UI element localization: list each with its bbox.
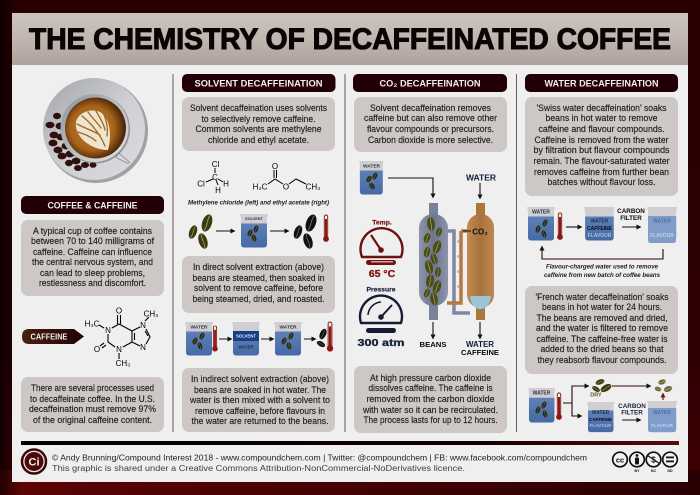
caffeine label [22, 329, 84, 344]
credit text [52, 454, 587, 473]
diagram: French water process: CAFFEINE [589, 417, 612, 422]
chemical structures: solvents: O [272, 162, 278, 171]
text block: French water: and the water is filtered to remove [536, 323, 668, 333]
diagram: Swiss water process: FLAVOUR [650, 233, 674, 239]
text block: direct extraction: In direct solvent extraction (above) [193, 262, 324, 272]
chemical structures: solvents: O [283, 182, 289, 192]
text block: typical cup: the central nervous system, and [32, 257, 153, 267]
chemical structures: solvents: H [215, 186, 221, 195]
diagram: indirect solvent extraction: WATER [191, 324, 208, 330]
text block: Swiss water: 'Swiss water decaffeination' soaks [536, 103, 667, 113]
diagram: indirect solvent extraction: SOLVENT [236, 334, 256, 338]
diagram: Swiss water process: FLAVOUR [588, 233, 612, 239]
text block: direct extraction: beans are steamed, then soaked in [192, 273, 325, 283]
text block: typical cup: caffeine. Caffeine can influence [33, 247, 152, 257]
caption: flavour-charged water: caffeine from new batch of coffee beans [544, 272, 660, 279]
text block: CO2 process: At high pressure carbon dioxide [370, 373, 491, 383]
text block: CO2 process: removed from the carbon dioxide [366, 394, 495, 404]
text block: decaffeination rules [21, 377, 164, 432]
chemical structures: solvents: H₃C [253, 182, 268, 192]
chemical structures: solvents: Cl [197, 180, 205, 188]
chemical structure: caffeine: CH₃ [116, 359, 130, 368]
gauge: temperature: 65 °C [369, 268, 396, 280]
text block: direct extraction: solvent to remove caffeine, before [194, 283, 323, 293]
text block: CO2 process [354, 366, 507, 433]
text block: indirect extraction: remove caffeine, before flavours in [195, 406, 325, 416]
text block: French water: added to the dried beans so that [540, 344, 664, 354]
diagram: indirect solvent extraction [185, 322, 333, 356]
text block: Swiss water: batches without flavour loss. [548, 177, 656, 187]
chemical structure: caffeine: O [94, 345, 100, 354]
heading: coffee and caffeine [21, 196, 164, 214]
text block: CO2 intro: caffeine but can also remove other [364, 113, 497, 123]
text block: CO2 process: dissolves caffeine. The caffeine is [368, 383, 493, 393]
diagram: indirect solvent extraction: WATER [238, 344, 254, 350]
licence badges: cc [616, 455, 624, 464]
logo: Compound Interest [22, 450, 46, 474]
footer [21, 441, 679, 474]
caption: flavour-charged water: Flavour-charged water used to remove [546, 264, 658, 270]
title [12, 13, 688, 65]
label: water and caffeine out: CAFFEINE [461, 348, 499, 357]
chemical structures: solvents [197, 160, 320, 195]
chemical structure: caffeine: N [140, 343, 146, 352]
diagram: French water process: CARBON [618, 403, 646, 410]
diagram: direct solvent extraction: SOLVENT [245, 217, 264, 221]
diagram: French water process: FLAVOUR [651, 423, 674, 428]
text block: CO2 intro: Carbon dioxide is more selective. [368, 135, 493, 145]
licence badges: $ [651, 455, 656, 465]
chemical structures: solvents: CH₃ [306, 182, 320, 192]
chemical structures: solvents: H [223, 180, 229, 188]
heading: solvent decaffeination: SOLVENT DECAFFEINATION [194, 78, 323, 88]
diagram: direct solvent extraction [187, 213, 329, 250]
diagram: CO2 extraction vessels [359, 161, 499, 357]
chemical structure: caffeine: CH₃ [144, 310, 158, 318]
vessel: carbon dioxide and water [467, 203, 494, 320]
chemical structure: caffeine: N [140, 321, 146, 330]
diagram: Swiss water process [527, 207, 677, 259]
label: water and caffeine out [461, 340, 499, 357]
text block: indirect extraction [182, 368, 335, 432]
diagram: Swiss water process: WATER [591, 218, 609, 224]
heading: water decaffeination [525, 74, 678, 92]
panel: coffee and caffeine [21, 78, 164, 432]
diagram: French water process: WATER [653, 410, 671, 416]
text block: typical cup: can lead to sleep problems, [40, 268, 145, 278]
gauge: temperature: Temp. [372, 220, 392, 226]
beaker: water and beans [359, 161, 384, 194]
text block: CO2 intro: Solvent decaffeination removes [370, 103, 492, 113]
text block: French water [525, 286, 678, 374]
text block: Swiss water [525, 97, 678, 196]
text block: indirect extraction: In indirect solvent extraction (above) [191, 374, 329, 384]
gauge: temperature [360, 220, 402, 280]
diagram: Swiss water process: WATER [532, 210, 550, 216]
text block: direct extraction: being steamed, dried, and roasted. [192, 294, 324, 304]
text block: typical cup: restlessness and discomfort. [39, 278, 146, 288]
logo: Compound Interest: Ci [28, 456, 40, 468]
text block: decaffeination rules: to decaffeinate coffee. In the U.S. [30, 394, 155, 404]
text block: French water: 'French water decaffeination' soaks [536, 292, 669, 302]
diagram: indirect solvent extraction: WATER [280, 324, 297, 330]
text block: solvent intro: chloride and ethyl acetate. [208, 135, 309, 145]
text block: Swiss water: beans in hot water to remove [546, 113, 658, 123]
diagram: French water process: FLAVOUR [590, 423, 612, 428]
text block: CO2 intro: flavour compounds or precursors. [367, 124, 494, 134]
text block: typical cup [21, 220, 164, 296]
licence badges: NC [651, 469, 656, 473]
chemical structure: caffeine: N [116, 345, 122, 354]
text block: French water: they reabsorb flavour compounds. [538, 355, 666, 365]
credit text: This graphic is shared under a Creative Commons Attribution-NonCommercial-NoDerivatives licence. [52, 464, 465, 473]
credit text: © Andy Brunning/Compound Interest 2018 - www.compoundchem.com | Twitter: @compoundchem | FB: www.facebook.com/compoundchem [52, 454, 587, 462]
text block: decaffeination rules: decaffeination must remove 97% [29, 404, 156, 414]
gauge: pressure: 300 atm [358, 337, 404, 349]
text block: French water: beans in hot water for 24 hours. [542, 302, 662, 312]
text block: Swiss water: by filtration but flavour compounds [534, 145, 670, 155]
text block: Swiss water: Caffeine is removed from the water [534, 135, 669, 145]
text block: typical cup: between 70 to 140 milligrams of [31, 236, 155, 246]
text block: Swiss water: remain. The flavour-saturated water [534, 156, 670, 166]
diagram: Swiss water process: CAFFEINE [587, 226, 613, 232]
chemical structure: caffeine: O [116, 306, 122, 316]
heading: coffee and caffeine: COFFEE & CAFFEINE [48, 200, 138, 210]
vessel: beans [419, 203, 448, 320]
diagram: French water process: WATER [533, 390, 551, 396]
panel: solvent decaffeination [182, 74, 336, 432]
text block: decaffeination rules: There are several processes used [31, 383, 154, 393]
panel: water decaffeination [525, 74, 678, 432]
chemical structure: caffeine: H₃C [85, 320, 100, 328]
pipe: carbon dioxide recirculation [447, 231, 470, 313]
caption: flavour-charged water [544, 264, 660, 279]
heading: solvent decaffeination [182, 74, 336, 92]
text block: solvent intro: to selectively remove caffeine. [202, 114, 316, 124]
label: water in: WATER [466, 174, 496, 182]
text block: indirect extraction: water is then mixed with a solvent to [189, 395, 330, 405]
diagram: French water process: FILTER [621, 410, 643, 416]
text block: Swiss water: caffeine and flavour compounds. [538, 124, 664, 134]
beaker: water and beans: WATER [363, 164, 381, 170]
panel: CO2 decaffeination [353, 74, 507, 433]
diagram: Swiss water process: FILTER [620, 215, 642, 222]
diagram: French water process: WATER [592, 410, 610, 416]
diagram: Swiss water process: WATER [653, 218, 671, 224]
diagram: French water process: DRY [590, 392, 602, 398]
diagram: French water process [528, 378, 677, 432]
text block: direct extraction [182, 256, 335, 313]
text block: CO2 process: with water so it can be recirculated. [362, 405, 498, 415]
licence badges: BY [634, 469, 640, 473]
label: CO2 [463, 227, 488, 236]
text block: solvent intro: Common solvents are methylene [196, 124, 322, 134]
text block: solvent intro: Solvent decaffeination uses solvents [190, 103, 328, 113]
heading: CO2 decaffeination [353, 74, 507, 92]
caffeine label: CAFFEINE [30, 333, 68, 342]
chemical structure: caffeine [85, 306, 158, 368]
gauge: pressure [358, 286, 404, 349]
text block: CO2 process: The process lasts for up to 12 hours. [364, 415, 498, 425]
caption: solvents: Methylene chloride (left) and ethyl acetate (right) [188, 199, 329, 206]
icon: cup of coffee [43, 78, 148, 183]
label: water and caffeine out: WATER [466, 340, 494, 349]
text block: indirect extraction: the water are returned to the beans. [192, 416, 328, 426]
text block: French water: The beans are removed and dried, [536, 313, 668, 323]
text block: Swiss water: removes caffeine from further bean [534, 167, 669, 177]
heading: water decaffeination: WATER DECAFFEINATION [544, 78, 659, 88]
heading: CO2 decaffeination: CO₂ DECAFFEINATION [380, 78, 481, 88]
chemical structure: caffeine: N [105, 326, 111, 335]
text block: typical cup: A typical cup of coffee contains [33, 226, 153, 236]
diagram: Swiss water process: CARBON [617, 208, 645, 215]
text block: solvent intro [182, 97, 335, 151]
label: CO2: CO₂ [472, 227, 488, 236]
label: beans out: BEANS [420, 340, 446, 349]
licence badges [613, 452, 677, 473]
gauge: pressure: Pressure [366, 286, 396, 294]
title: THE CHEMISTRY OF DECAFFEINATED COFFEE [29, 23, 671, 56]
chemical structures: solvents: C [212, 173, 218, 182]
text block: French water: caffeine. The caffeine-free water is [536, 334, 668, 344]
text block: decaffeination rules: of the original caffeine content. [33, 415, 152, 425]
text block: indirect extraction: beans are soaked in hot water. The [194, 385, 326, 395]
licence badges: ND [667, 469, 673, 473]
text block: CO2 intro [354, 97, 507, 152]
chemical structures: solvents: Cl [212, 160, 219, 169]
